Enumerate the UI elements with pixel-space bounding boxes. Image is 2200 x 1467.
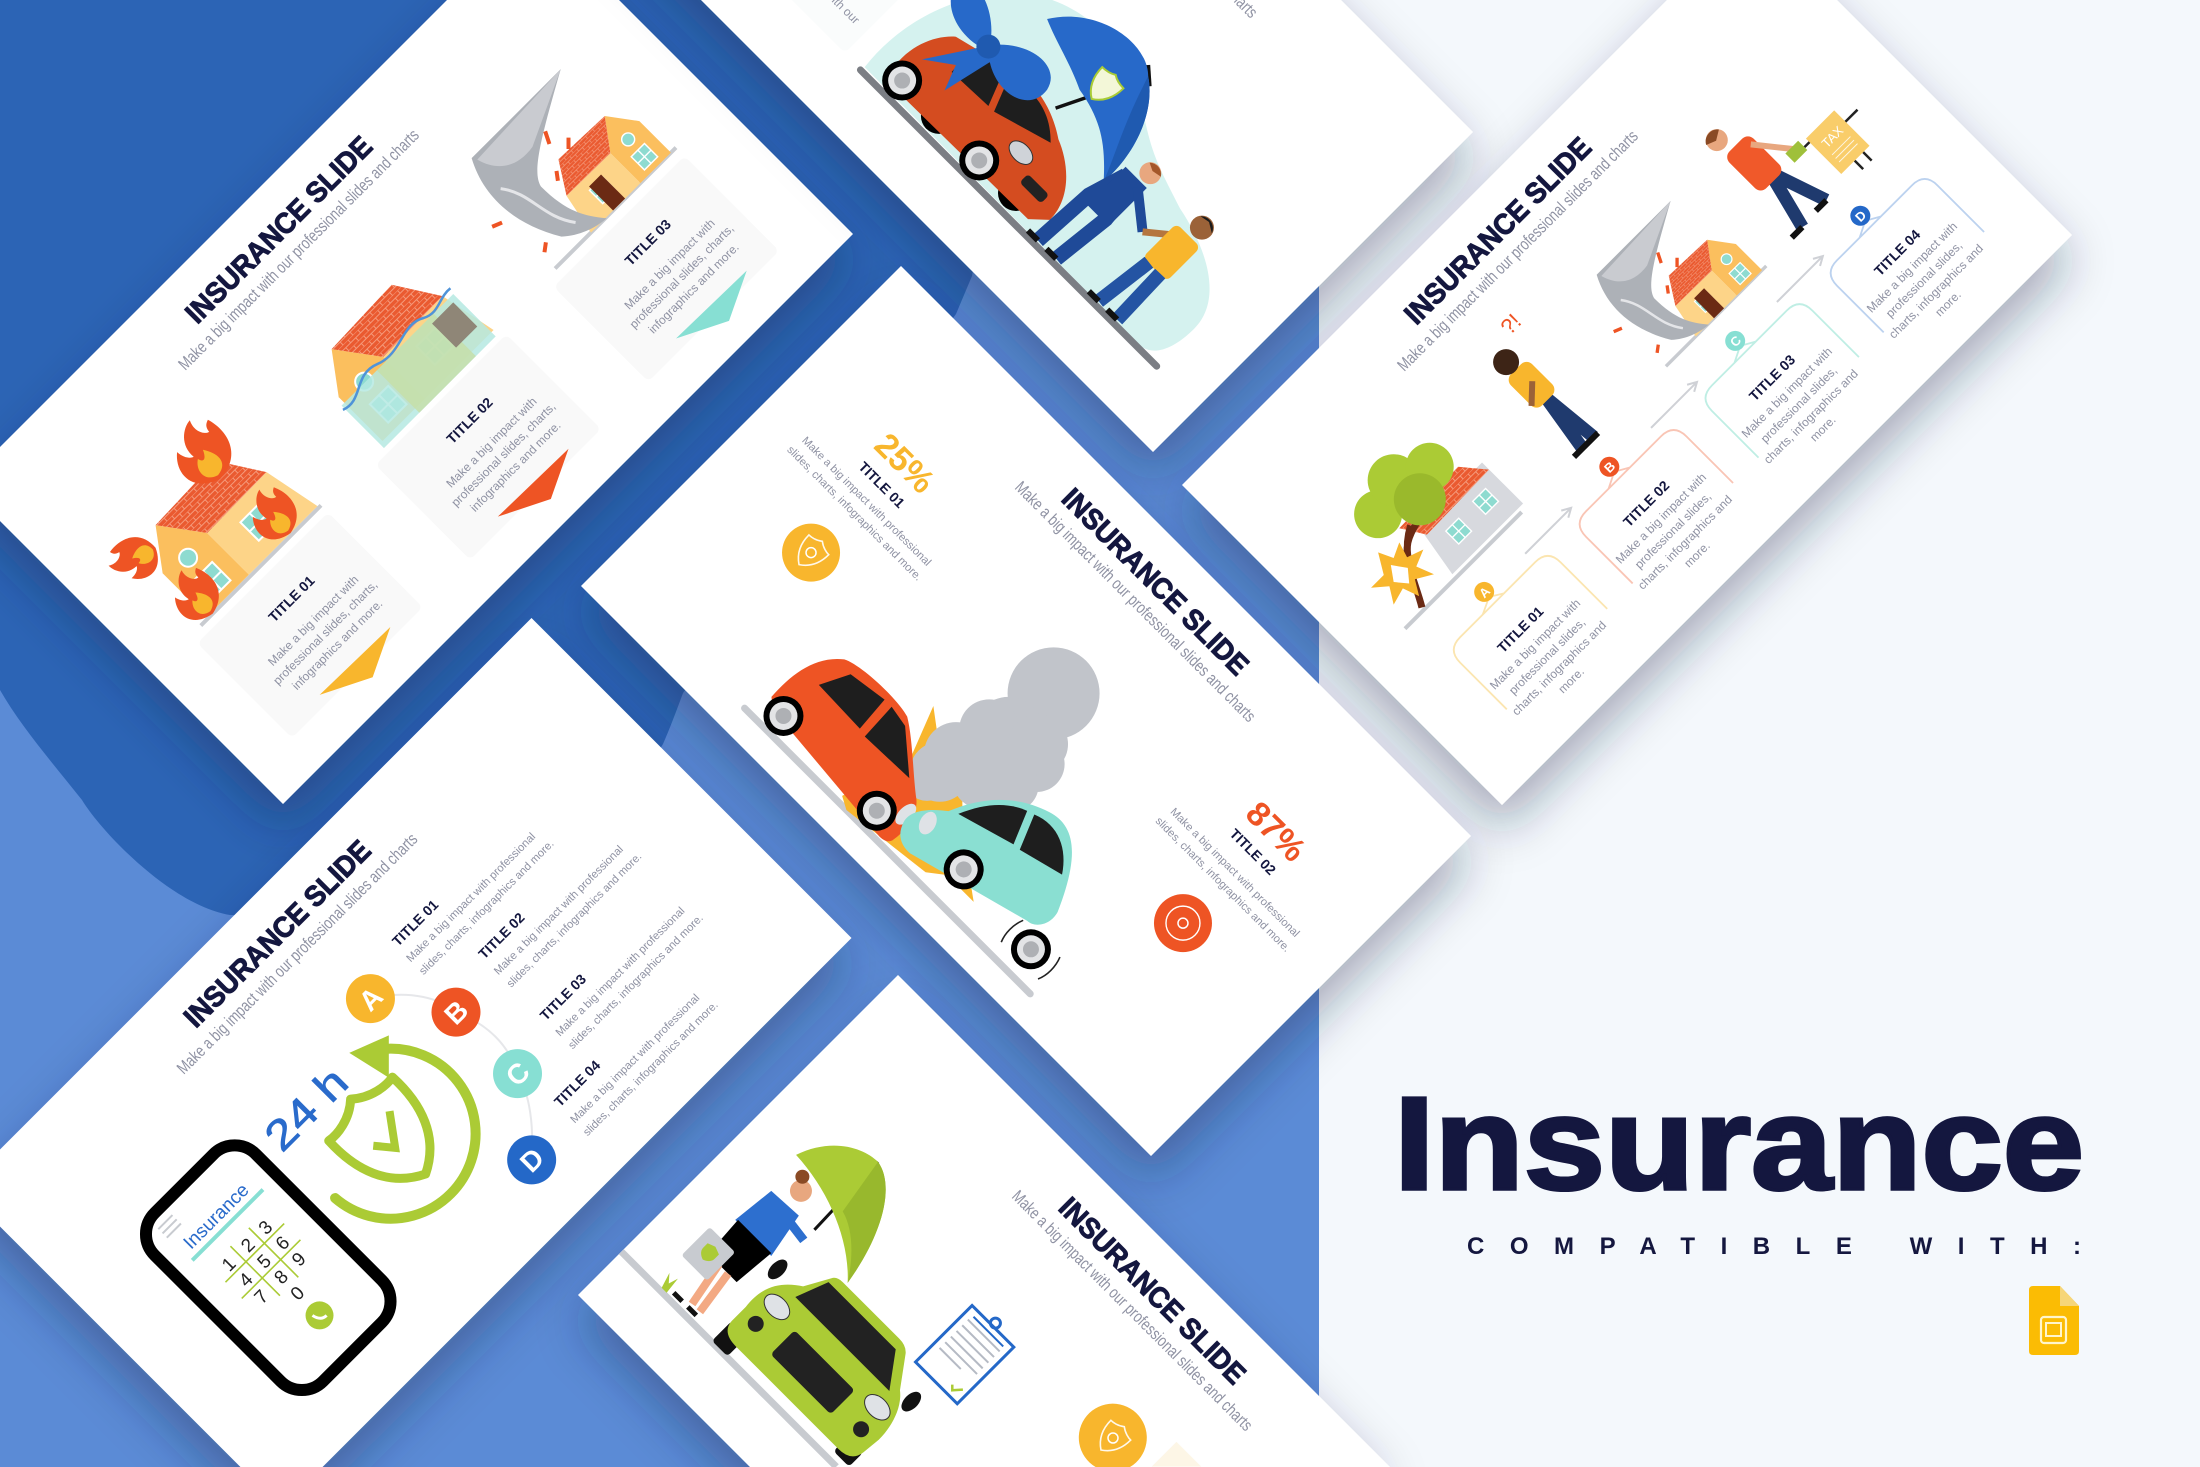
ground line: [860, 70, 1157, 366]
text card: title 01: Make a big impact with: [265, 573, 361, 669]
step A outline and text: professional slides,: [1506, 615, 1588, 697]
step C outline and text: charts, infographics and: [1761, 367, 1861, 467]
step B outline and text: B: [1601, 459, 1618, 476]
text card: title 01: TITLE 01: [265, 572, 318, 625]
background: light blue block: [0, 0, 1319, 1467]
text card: title 02: TITLE 02: [443, 394, 496, 447]
step A outline and text: more.: [1555, 665, 1587, 696]
slide title: INSURANCE SLIDE: [1399, 132, 1598, 331]
illustration: phone: 4: [235, 1269, 258, 1292]
item: title 02: slides, charts, infographics and more.: [505, 851, 644, 990]
illustration: phone: Insurance: [180, 1180, 254, 1254]
illustration: clipboard: [916, 1299, 1020, 1404]
item: title 04: Make a big impact with professional: [568, 992, 702, 1126]
slide content: emergency phone: [44, 702, 757, 1414]
ground line: [745, 708, 1030, 994]
illustration: phone: 3: [255, 1217, 277, 1239]
slide title: INSURANCE SLIDE: [180, 131, 379, 330]
step arrows: [1522, 253, 1826, 557]
slide content: umbrella car: [621, 995, 1280, 1467]
step C outline and text: [1681, 280, 1882, 480]
illustration: red car with bow: [866, 0, 1129, 240]
badge B: B: [438, 994, 474, 1031]
text card: title 02: Make a big impact with: [443, 394, 540, 491]
text card: title 03: professional slides, charts,: [627, 221, 737, 331]
illustration: phone: 6: [272, 1233, 294, 1255]
badge C: C: [500, 1056, 536, 1092]
badge B: [421, 977, 491, 1047]
icon: google slides: [2029, 1286, 2079, 1355]
illustration: woman with umbrella: [655, 1110, 923, 1378]
stat block: 25 percent: 25%: [867, 426, 942, 501]
illustration: red car: [753, 636, 965, 848]
stat block: 25 percent: Make a big impact with professional: [799, 435, 933, 569]
step D outline and text: charts, infographics and: [1886, 241, 1986, 341]
stat block: 87 percent: slides, charts, infographics and more.: [1153, 815, 1292, 955]
stat block: 87 percent: Make a big impact with professional: [1168, 806, 1302, 940]
panel: slide with emergency phone: [0, 618, 852, 1467]
slide subtitle: Make a big impact with our professional slides and charts: [173, 830, 421, 1078]
slide subtitle: Make a big impact with our professional slides and charts: [1011, 478, 1259, 726]
step A outline and text: charts, infographics and: [1509, 618, 1609, 718]
item: title 03: [536, 882, 706, 1052]
step A outline and text: TITLE 01: [1494, 603, 1547, 656]
stat block: 25 percent: TITLE 01: [855, 458, 908, 511]
illustration: flooded house: [305, 256, 498, 450]
item: title 02: Make a big impact with professional: [492, 844, 626, 977]
item: title 04: slides, charts, infographics and more.: [581, 999, 721, 1139]
badge D: [497, 1125, 566, 1195]
text card: title 02: [375, 334, 611, 570]
panel: slide with umbrella car: [578, 975, 1390, 1467]
text card fragment: [680, 0, 931, 53]
item: title 01: Make a big impact with professional: [404, 831, 538, 965]
illustration: green car: [704, 1238, 942, 1467]
text card: title 01: [197, 512, 433, 748]
text card: title 02: infographics and more.: [467, 418, 564, 515]
panel: slide with gift car: [583, 0, 1473, 452]
item: title 03: TITLE 03: [537, 971, 589, 1023]
connecting arc: [370, 955, 575, 1160]
step B outline and text: TITLE 02: [1620, 477, 1673, 530]
panel: slide with car crash: [581, 266, 1471, 1156]
illustration: man paying tax: [1698, 47, 1890, 239]
slide content: car crash: [636, 321, 1417, 1102]
step D outline and text: more.: [1932, 288, 1964, 319]
step B outline and text: Make a big impact with: [1613, 470, 1709, 566]
slide content: process steps: [1242, 0, 2007, 743]
item: title 03: Make a big impact with professional: [554, 905, 687, 1039]
badge D: D: [514, 1142, 550, 1178]
text card: title 03: TITLE 03: [621, 216, 674, 269]
illustration: tornado and house: [1577, 186, 1767, 376]
stat block: 87 percent: 87%: [1238, 794, 1313, 869]
slide title: INSURANCE SLIDE: [1055, 483, 1254, 682]
cream text card fragment: [1152, 1442, 1201, 1467]
step B outline and text: professional slides,: [1632, 489, 1714, 571]
panel: slide with house risks: [0, 0, 853, 804]
step D outline and text: [1807, 155, 2007, 355]
illustration: phone: 2: [237, 1235, 260, 1257]
badge C: [483, 1039, 552, 1108]
step D outline and text: Make a big impact with: [1864, 219, 1960, 315]
stat block: 25 percent: [784, 385, 983, 583]
step B outline and text: charts, infographics and: [1635, 492, 1735, 592]
icon: yellow shield badge: [770, 512, 852, 594]
icon: red network badge: [1142, 882, 1224, 964]
label: 24 h: 24 h: [255, 1058, 357, 1160]
subtitle: compatible with: COMPATIBLE WITH:: [1467, 1233, 2081, 1260]
slide title: INSURANCE SLIDE: [178, 835, 378, 1034]
slide content: house risks: [10, 0, 789, 759]
illustration: phone: 0: [287, 1283, 309, 1305]
text card: title 01: professional slides, charts,: [270, 578, 380, 688]
illustration: tree on house: [1307, 409, 1527, 629]
illustration: confused person: ?!: [1495, 309, 1526, 339]
item: title 01: TITLE 01: [389, 896, 442, 949]
step C outline and text: Make a big impact with: [1739, 344, 1835, 441]
illustration: phone: 9: [288, 1249, 311, 1271]
badge A: A: [353, 981, 389, 1017]
slide content: gift car: [679, 0, 1388, 366]
stat block: 87 percent: [1153, 753, 1355, 955]
badge A: [336, 964, 405, 1033]
item: title 03: slides, charts, infographics and more.: [566, 912, 706, 1052]
illustration: teal car: [888, 755, 1096, 934]
illustration: phone: [134, 1133, 403, 1402]
illustration: handshake people: [1028, 133, 1220, 325]
teal blob: [862, 0, 1297, 364]
text card: title 03: Make a big impact with: [622, 216, 718, 312]
slide title: INSURANCE SLIDE: [1052, 1192, 1251, 1391]
icon: 24h shield arrow: [270, 1013, 511, 1254]
step C outline and text: C: [1727, 332, 1745, 350]
illustration: loose wheel: [996, 915, 1066, 984]
step A outline and text: Make a big impact with: [1487, 596, 1583, 692]
stat block: 87 percent: TITLE 02: [1227, 825, 1279, 878]
illustration: confused person: [1467, 309, 1615, 457]
main title: Insurance: [1394, 1070, 2084, 1217]
step C outline and text: professional slides,: [1758, 364, 1840, 446]
text card: title 03: [554, 156, 789, 392]
step D outline and text: D: [1852, 207, 1869, 225]
step C outline and text: TITLE 03: [1746, 351, 1798, 404]
text card: title 03: infographics and more.: [646, 240, 742, 336]
illustration: tornado and house: [448, 51, 677, 280]
item: title 04: [550, 968, 721, 1139]
illustration: phone: 8: [271, 1266, 293, 1289]
icon: yellow shield badge: [1079, 1404, 1147, 1467]
step B outline and text: more.: [1681, 539, 1713, 570]
illustration: phone: 5: [254, 1251, 276, 1273]
item: title 02: [474, 820, 644, 990]
step A outline and text: A: [1476, 583, 1494, 601]
item: title 02: TITLE 02: [475, 909, 528, 962]
illustration: man paying tax: TAX: [1819, 123, 1847, 151]
ground line: [621, 1252, 836, 1467]
text card: title 02: professional slides, charts,: [449, 400, 558, 509]
item: title 01: [387, 808, 557, 977]
yellow impact burst: [837, 705, 1051, 920]
illustration: phone: 1: [218, 1254, 241, 1276]
stat block: 25 percent: slides, charts, infographics and more.: [784, 444, 924, 583]
slide subtitle: Make a big impact with our professional slides and charts: [1394, 127, 1642, 375]
smoke cloud: [891, 620, 1133, 862]
step A outline and text: [1430, 532, 1630, 732]
illustration: blue umbrella: [994, 0, 1188, 182]
text card: title 01: infographics and more.: [289, 597, 385, 693]
step B outline and text: [1556, 406, 1756, 606]
slide subtitle: Make a big impact with our professional slides and charts: [175, 126, 423, 374]
illustration: house on fire: [67, 393, 321, 647]
panel: slide with process steps: [1182, 0, 2072, 805]
background: dark blue blob: [0, 0, 1020, 915]
item: title 04: TITLE 04: [551, 1057, 603, 1110]
illustration: phone: 7: [251, 1286, 273, 1309]
step D outline and text: professional slides,: [1883, 238, 1965, 320]
step D outline and text: TITLE 04: [1871, 226, 1924, 279]
item: title 01: slides, charts, infographics and more.: [417, 838, 557, 977]
step C outline and text: more.: [1807, 413, 1839, 444]
